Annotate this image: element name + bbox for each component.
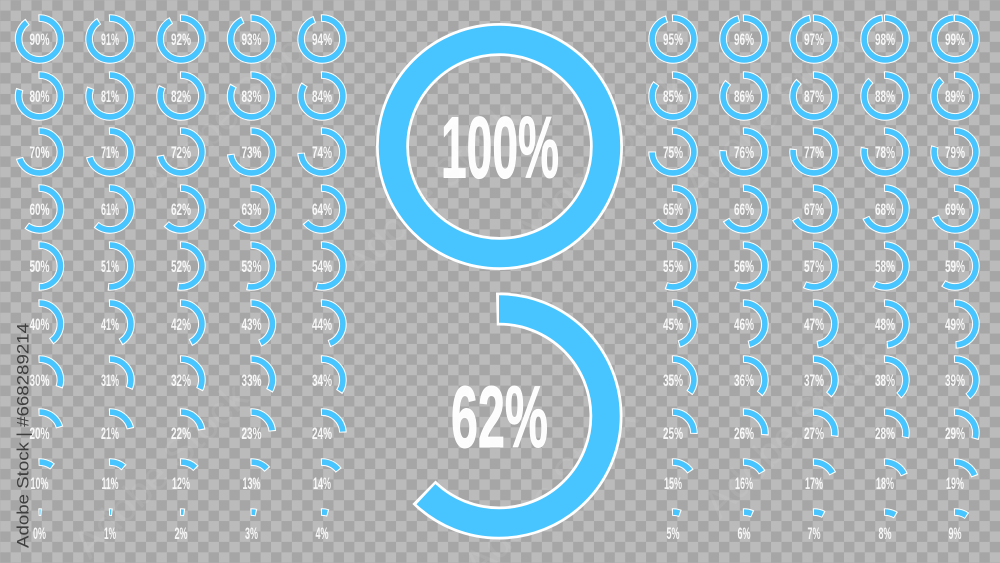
ring 77% xyxy=(792,130,836,174)
ring 67% xyxy=(792,187,836,231)
ring 12% xyxy=(159,461,203,505)
ring 51%: 51% xyxy=(101,257,119,276)
ring 70% xyxy=(18,130,61,174)
ring 76% xyxy=(722,130,766,174)
ring 44%: 44% xyxy=(312,315,332,334)
ring 53% xyxy=(230,244,273,288)
ring 74% xyxy=(300,130,344,174)
ring 65%: 65% xyxy=(663,200,683,219)
ring 32%: 32% xyxy=(171,371,191,390)
ring 24% xyxy=(300,411,344,455)
large ring 100% xyxy=(392,40,606,254)
ring 4% xyxy=(300,511,344,555)
ring 69%: 69% xyxy=(945,200,965,219)
stock id vertical watermark: Adobe Stock | #668289214 xyxy=(14,323,32,548)
ring 49% xyxy=(933,302,977,346)
ring 87% xyxy=(792,74,836,118)
ring 40% xyxy=(18,302,61,346)
ring 93% xyxy=(230,17,273,61)
ring 94%: 94% xyxy=(312,30,332,49)
ring 15% xyxy=(651,461,695,505)
ring 83% xyxy=(230,74,273,118)
ring 63%: 63% xyxy=(242,200,262,219)
ring 36% xyxy=(722,358,766,402)
ring 62%: 62% xyxy=(171,200,191,219)
ring 40%: 40% xyxy=(30,315,50,334)
ring 95%: 95% xyxy=(663,30,683,49)
ring 23% xyxy=(230,411,273,455)
ring 26% xyxy=(722,411,766,455)
ring 34%: 34% xyxy=(312,371,332,390)
panel: right percentage grid 5-9, 15-19 ... 95-99 xyxy=(651,17,977,555)
ring 39% xyxy=(933,358,977,402)
ring 8% xyxy=(863,511,907,555)
ring 10% xyxy=(18,461,61,505)
ring 57%: 57% xyxy=(804,257,824,276)
ring 42% xyxy=(159,302,203,346)
ring 50% xyxy=(18,244,61,288)
ring 28% xyxy=(863,411,907,455)
ring 92% xyxy=(159,17,203,61)
ring 3% xyxy=(230,511,273,555)
ring 61% xyxy=(88,187,132,231)
ring 80%: 80% xyxy=(30,87,50,106)
ring 94% xyxy=(300,17,344,61)
ring 66% xyxy=(722,187,766,231)
faint stock watermarks: Adobe Stock xyxy=(65,374,257,563)
ring 21% xyxy=(88,411,132,455)
ring 11% xyxy=(88,461,132,505)
ring 96%: 96% xyxy=(734,30,754,49)
large ring 100%: 100% xyxy=(441,100,559,196)
ring 90% xyxy=(18,17,61,61)
ring 89% xyxy=(933,74,977,118)
ring 19% xyxy=(933,461,977,505)
ring 11%: 11% xyxy=(102,474,118,493)
large ring 62%: 62% xyxy=(451,369,548,466)
ring 66%: 66% xyxy=(734,200,754,219)
ring 77%: 77% xyxy=(804,143,824,162)
ring 70%: 70% xyxy=(30,143,50,162)
ring 37% xyxy=(792,358,836,402)
ring 43% xyxy=(230,302,273,346)
ring 7%: 7% xyxy=(808,524,820,543)
ring 24%: 24% xyxy=(312,424,332,443)
ring 57% xyxy=(792,244,836,288)
ring 80% xyxy=(18,74,61,118)
ring 33% xyxy=(230,358,273,402)
ring 37%: 37% xyxy=(804,371,824,390)
ring 45%: 45% xyxy=(663,315,683,334)
ring 90%: 90% xyxy=(30,30,50,49)
ring 89%: 89% xyxy=(945,87,965,106)
ring 52%: 52% xyxy=(171,257,191,276)
ring 20%: 20% xyxy=(30,424,50,443)
ring 27%: 27% xyxy=(804,424,824,443)
ring 87%: 87% xyxy=(804,87,824,106)
ring 9%: 9% xyxy=(949,524,961,543)
faint stock watermarks: Adobe Stock xyxy=(335,94,527,287)
ring 73% xyxy=(230,130,273,174)
ring 58%: 58% xyxy=(875,257,895,276)
ring 10%: 10% xyxy=(30,474,48,493)
ring 59% xyxy=(933,244,977,288)
ring 12%: 12% xyxy=(172,474,190,493)
ring 59%: 59% xyxy=(945,257,965,276)
ring 86% xyxy=(722,74,766,118)
ring 7% xyxy=(792,511,836,555)
faint stock watermarks: Adobe Stock xyxy=(675,14,867,207)
ring 76%: 76% xyxy=(734,143,754,162)
ring 6%: 6% xyxy=(738,524,750,543)
ring 6% xyxy=(722,511,766,555)
ring 60%: 60% xyxy=(30,200,50,219)
ring 78% xyxy=(863,130,907,174)
large ring 62% xyxy=(389,306,609,526)
ring 54% xyxy=(300,244,344,288)
ring 84%: 84% xyxy=(312,87,332,106)
ring 98% xyxy=(863,17,907,61)
ring 68%: 68% xyxy=(875,200,895,219)
ring 33%: 33% xyxy=(242,371,262,390)
ring 95% xyxy=(651,17,695,61)
ring 17% xyxy=(792,461,836,505)
ring 47%: 47% xyxy=(804,315,824,334)
ring 72% xyxy=(159,130,203,174)
ring 97%: 97% xyxy=(804,30,824,49)
ring 78%: 78% xyxy=(875,143,895,162)
ring 49%: 49% xyxy=(945,315,965,334)
ring 19%: 19% xyxy=(946,474,964,493)
ring 20% xyxy=(18,411,61,455)
ring 69% xyxy=(933,187,977,231)
ring 39%: 39% xyxy=(945,371,965,390)
ring 17%: 17% xyxy=(805,474,823,493)
ring 46%: 46% xyxy=(734,315,754,334)
ring 26%: 26% xyxy=(734,424,754,443)
ring 79% xyxy=(933,130,977,174)
ring 2% xyxy=(159,511,203,555)
faint stock watermarks: Adobe Stock xyxy=(505,64,697,257)
faint stock watermarks: Adobe Stock xyxy=(695,334,887,527)
ring 98%: 98% xyxy=(875,30,895,49)
ring 81% xyxy=(88,74,132,118)
ring 56%: 56% xyxy=(734,257,754,276)
ring 63% xyxy=(230,187,273,231)
ring 85% xyxy=(651,74,695,118)
ring 31%: 31% xyxy=(101,371,119,390)
ring 61%: 61% xyxy=(101,200,119,219)
ring 16% xyxy=(722,461,766,505)
ring 73%: 73% xyxy=(242,143,262,162)
ring 55%: 55% xyxy=(663,257,683,276)
ring 56% xyxy=(722,244,766,288)
ring 0% xyxy=(18,511,61,555)
ring 35%: 35% xyxy=(663,371,683,390)
ring 9% xyxy=(933,511,977,555)
ring 4%: 4% xyxy=(316,524,328,543)
ring 88%: 88% xyxy=(875,87,895,106)
ring 99% xyxy=(933,17,977,61)
ring 96% xyxy=(722,17,766,61)
ring 36%: 36% xyxy=(734,371,754,390)
ring 18%: 18% xyxy=(876,474,894,493)
ring 65% xyxy=(651,187,695,231)
ring 27% xyxy=(792,411,836,455)
ring 68% xyxy=(863,187,907,231)
ring 34% xyxy=(300,358,344,402)
ring 85%: 85% xyxy=(663,87,683,106)
ring 13% xyxy=(230,461,273,505)
ring 2%: 2% xyxy=(175,524,187,543)
ring 25%: 25% xyxy=(663,424,683,443)
ring 45% xyxy=(651,302,695,346)
ring 62% xyxy=(159,187,203,231)
ring 79%: 79% xyxy=(945,143,965,162)
ring 22%: 22% xyxy=(171,424,191,443)
ring 82%: 82% xyxy=(171,87,191,106)
ring 67%: 67% xyxy=(804,200,824,219)
ring 99%: 99% xyxy=(945,30,965,49)
ring 44% xyxy=(300,302,344,346)
ring 81%: 81% xyxy=(101,87,119,106)
faint stock watermarks: Adobe Stock xyxy=(135,14,327,207)
ring 18% xyxy=(863,461,907,505)
ring 22% xyxy=(159,411,203,455)
ring 84% xyxy=(300,74,344,118)
ring 1% xyxy=(88,511,132,555)
ring 51% xyxy=(88,244,132,288)
ring 43%: 43% xyxy=(242,315,262,334)
ring 47% xyxy=(792,302,836,346)
ring 71%: 71% xyxy=(101,143,119,162)
ring 48% xyxy=(863,302,907,346)
ring 14%: 14% xyxy=(313,474,331,493)
ring 97% xyxy=(792,17,836,61)
ring 48%: 48% xyxy=(875,315,895,334)
ring 91% xyxy=(88,17,132,61)
ring 55% xyxy=(651,244,695,288)
ring 83%: 83% xyxy=(242,87,262,106)
ring 29%: 29% xyxy=(945,424,965,443)
ring 53%: 53% xyxy=(242,257,262,276)
ring 15%: 15% xyxy=(664,474,682,493)
ring 71% xyxy=(88,130,132,174)
ring 30%: 30% xyxy=(30,371,50,390)
ring 38%: 38% xyxy=(875,371,895,390)
ring 25% xyxy=(651,411,695,455)
ring 23%: 23% xyxy=(242,424,262,443)
ring 1%: 1% xyxy=(104,524,116,543)
ring 64% xyxy=(300,187,344,231)
ring 5% xyxy=(651,511,695,555)
ring 14% xyxy=(300,461,344,505)
ring 60% xyxy=(18,187,61,231)
ring 58% xyxy=(863,244,907,288)
ring 74%: 74% xyxy=(312,143,332,162)
ring 64%: 64% xyxy=(312,200,332,219)
ring 46% xyxy=(722,302,766,346)
ring 42%: 42% xyxy=(171,315,191,334)
ring 88% xyxy=(863,74,907,118)
ring 75%: 75% xyxy=(663,143,683,162)
panel: left percentage grid 0-4, 10-14 ... 90-94 xyxy=(18,17,344,555)
ring 21%: 21% xyxy=(101,424,119,443)
ring 13%: 13% xyxy=(242,474,260,493)
ring 30% xyxy=(18,358,61,402)
ring 52% xyxy=(159,244,203,288)
ring 28%: 28% xyxy=(875,424,895,443)
ring 72%: 72% xyxy=(171,143,191,162)
ring 8%: 8% xyxy=(879,524,891,543)
ring 38% xyxy=(863,358,907,402)
ring 0%: 0% xyxy=(33,524,46,543)
ring 5%: 5% xyxy=(667,524,679,543)
ring 32% xyxy=(159,358,203,402)
ring 31% xyxy=(88,358,132,402)
ring 91%: 91% xyxy=(101,30,119,49)
ring 50%: 50% xyxy=(30,257,50,276)
ring 75% xyxy=(651,130,695,174)
ring 41%: 41% xyxy=(101,315,119,334)
ring 3%: 3% xyxy=(245,524,258,543)
ring 29% xyxy=(933,411,977,455)
ring 54%: 54% xyxy=(312,257,332,276)
ring 92%: 92% xyxy=(171,30,191,49)
ring 93%: 93% xyxy=(242,30,262,49)
ring 41% xyxy=(88,302,132,346)
ring 16%: 16% xyxy=(735,474,753,493)
ring 86%: 86% xyxy=(734,87,754,106)
ring 35% xyxy=(651,358,695,402)
ring 82% xyxy=(159,74,203,118)
